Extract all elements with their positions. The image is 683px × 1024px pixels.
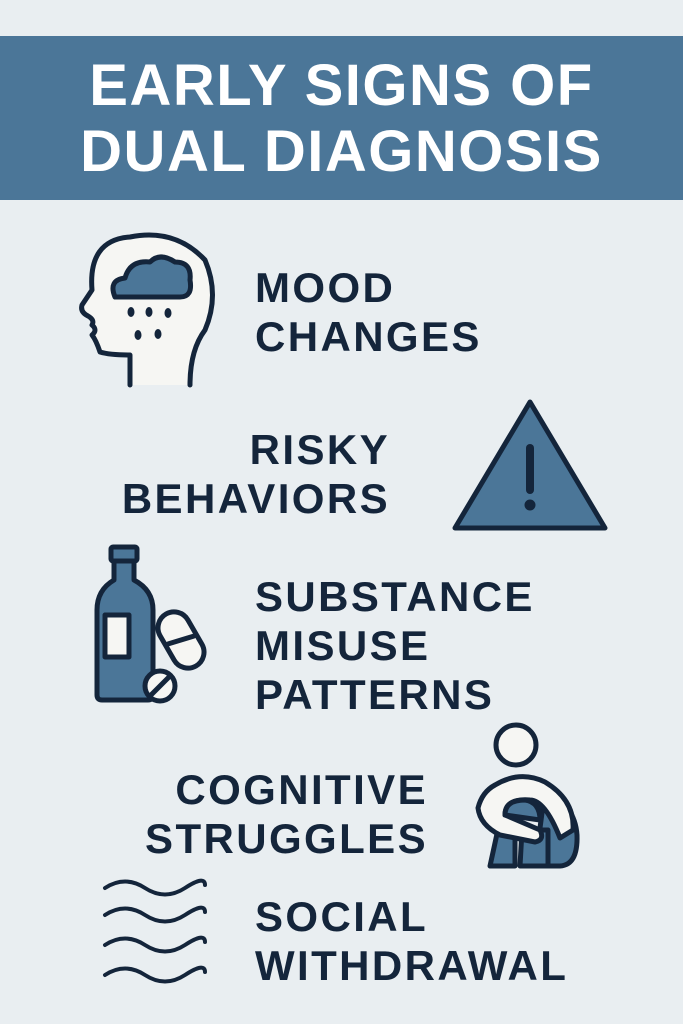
title banner (0, 36, 683, 200)
text: risky behaviors: BEHAVIORS (122, 475, 390, 522)
icon: sitting person (478, 725, 577, 866)
text: substance misuse patterns: SUBSTANCE (255, 573, 535, 620)
text: cognitive struggles: COGNITIVE (175, 766, 428, 813)
text: risky behaviors: RISKY (250, 426, 390, 473)
text: substance misuse patterns: MISUSE (255, 622, 430, 669)
text: social withdrawal (255, 893, 568, 989)
text: cognitive struggles: STRUGGLES (145, 815, 428, 862)
text: mood changes (255, 264, 482, 360)
icon: waves (105, 881, 205, 982)
text: cognitive struggles (145, 766, 428, 862)
text: social withdrawal: WITHDRAWAL (255, 942, 568, 989)
title banner: EARLY SIGNS OF (89, 53, 594, 118)
text: social withdrawal: SOCIAL (255, 893, 428, 940)
icon: bottle and pills (97, 547, 210, 701)
text: mood changes: MOOD (255, 264, 395, 311)
text: substance misuse patterns (255, 573, 535, 718)
icon: head with rain cloud (82, 235, 212, 385)
text: risky behaviors (122, 426, 390, 522)
text: substance misuse patterns: PATTERNS (255, 671, 494, 718)
icon: warning triangle (455, 402, 605, 528)
text: mood changes: CHANGES (255, 313, 482, 360)
title banner: DUAL DIAGNOSIS (80, 119, 603, 184)
